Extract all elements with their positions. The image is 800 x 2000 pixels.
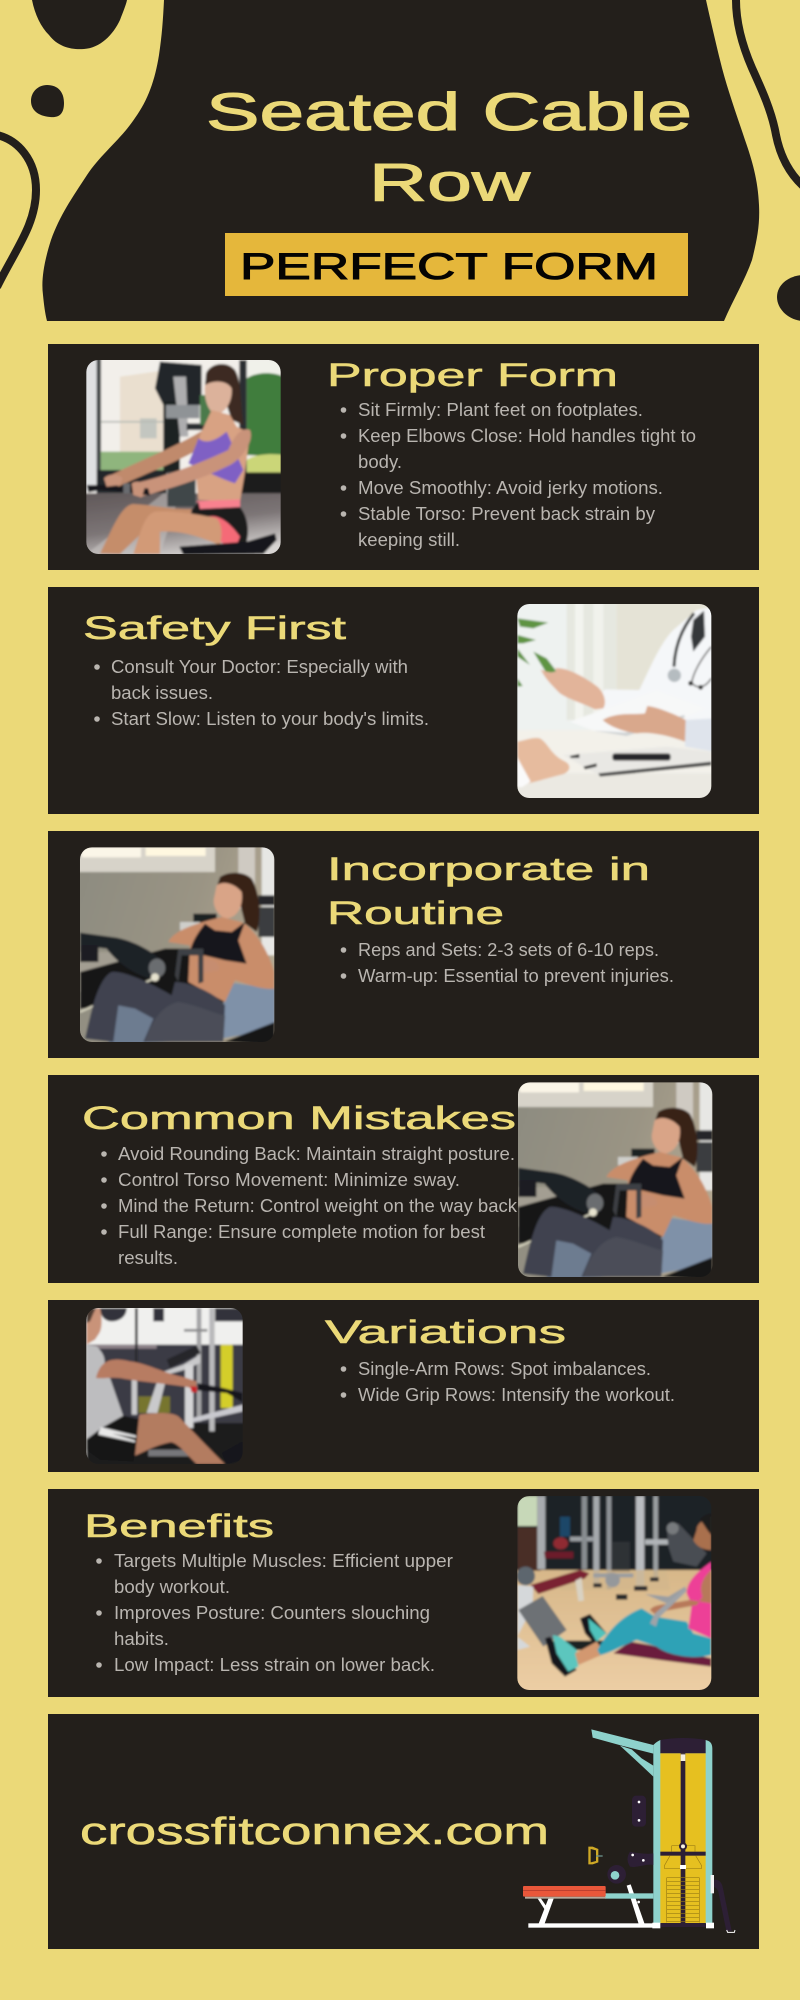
heading: variations: Variations xyxy=(325,1314,566,1350)
bench xyxy=(531,1570,589,1594)
handle xyxy=(190,1386,197,1392)
list: proper form: Move Smoothly: Avoid jerky motions. xyxy=(358,478,663,498)
list: benefits xyxy=(96,1551,453,1675)
thighs xyxy=(100,504,192,554)
seat legs and base xyxy=(528,1899,714,1928)
arm xyxy=(650,1570,711,1616)
panel: variations xyxy=(48,1300,759,1472)
photo: woman on rowing machine xyxy=(86,360,281,554)
list: common mistakes: Control Torso Movement: Minimize sway. xyxy=(118,1170,460,1190)
pulley xyxy=(627,1852,653,1867)
chest and arms xyxy=(168,917,274,1002)
list: common mistakes: Mind the Return: Control weight on the way back xyxy=(118,1196,518,1216)
hands xyxy=(195,959,219,974)
title xyxy=(206,83,692,212)
list: benefits: Low Impact: Less strain on lower back. xyxy=(114,1655,435,1675)
upper pad xyxy=(632,1796,646,1827)
subtitle badge xyxy=(225,233,688,296)
panel: incorporate in routine xyxy=(48,831,759,1058)
list: benefits: habits. xyxy=(114,1629,169,1649)
list: benefits: body workout. xyxy=(114,1577,230,1597)
list: common mistakes: results. xyxy=(118,1248,178,1268)
seat xyxy=(179,533,277,555)
photo: doctor with tablet xyxy=(517,604,712,798)
hands xyxy=(104,475,123,487)
clipboard xyxy=(574,748,710,772)
decorative blob top left xyxy=(32,0,127,49)
seat xyxy=(523,1886,606,1899)
title: Row xyxy=(369,154,531,212)
heading: proper form: Proper Form xyxy=(327,357,618,393)
tablet xyxy=(576,710,642,732)
cable xyxy=(80,978,155,1012)
heading: common mistakes: Common Mistakes xyxy=(82,1100,516,1136)
hair xyxy=(217,873,259,932)
list: variations xyxy=(341,1359,675,1405)
bra xyxy=(190,922,247,964)
list: common mistakes: Avoid Rounding Back: Maintain straight posture. xyxy=(118,1144,515,1164)
lower hand xyxy=(603,706,686,742)
website url: crossfitconnex.com xyxy=(80,1811,549,1853)
list: benefits: Improves Posture: Counters slouching xyxy=(114,1603,430,1623)
seat rail xyxy=(605,1893,653,1899)
list: proper form xyxy=(341,400,696,550)
bra xyxy=(188,432,243,483)
pad xyxy=(80,933,160,979)
shorts xyxy=(192,502,248,550)
photo: woman with cable handle, repeated xyxy=(513,1077,726,1284)
leggings xyxy=(597,1608,711,1657)
panel: safety first xyxy=(48,587,759,814)
right machine xyxy=(667,1523,707,1567)
list: benefits: Targets Multiple Muscles: Efficient upper xyxy=(114,1551,453,1571)
list: proper form: Stable Torso: Prevent back strain by xyxy=(358,504,655,524)
cable arm xyxy=(591,1729,653,1754)
rear bar xyxy=(711,1875,735,1932)
tie xyxy=(691,611,705,652)
list: proper form: keeping still. xyxy=(358,530,460,550)
header blob xyxy=(42,0,759,321)
hair xyxy=(205,364,243,425)
title: Seated Cable xyxy=(206,83,692,142)
coat xyxy=(602,607,712,718)
stethoscope xyxy=(674,613,694,667)
dark floor xyxy=(80,949,228,1009)
arm xyxy=(96,1359,197,1389)
machine xyxy=(516,1567,535,1585)
list: variations: Wide Grip Rows: Intensify the workout. xyxy=(358,1385,675,1405)
decorative blob right xyxy=(777,275,800,321)
decorative curve right xyxy=(736,0,800,186)
seat rail xyxy=(613,1642,711,1667)
list: variations: Single-Arm Rows: Spot imbalances. xyxy=(358,1359,651,1379)
icon: cable row machine xyxy=(523,1729,735,1932)
shorts xyxy=(86,1416,142,1461)
list: proper form: Sit Firmly: Plant feet on footplates. xyxy=(358,400,643,420)
list: safety first xyxy=(94,657,429,729)
head xyxy=(86,1308,102,1345)
heading: incorporate in routine xyxy=(327,851,650,931)
list: proper form: Keep Elbows Close: Hold handles tight to xyxy=(358,426,696,446)
shirt xyxy=(86,1345,123,1440)
subtitle badge: PERFECT FORM xyxy=(240,246,658,287)
list: common mistakes: Full Range: Ensure complete motion for best xyxy=(118,1222,485,1242)
panel: website footer xyxy=(48,1714,759,1949)
list: safety first: back issues. xyxy=(111,683,213,703)
tower top xyxy=(660,1738,706,1753)
decorative small blob xyxy=(31,85,64,117)
photo: woman on rowing machine in gym xyxy=(510,1490,723,1697)
weight stack xyxy=(660,1753,706,1927)
heading: safety first: Safety First xyxy=(83,610,346,646)
panel: common mistakes xyxy=(48,1075,759,1284)
list: common mistakes xyxy=(101,1144,518,1268)
photo: woman with cable handle xyxy=(75,842,288,1049)
front arm xyxy=(133,429,251,497)
panel: proper form xyxy=(48,344,759,570)
list: incorporate in routine: Reps and Sets: 2-3 sets of 6-10 reps. xyxy=(358,940,659,960)
tower frame xyxy=(653,1740,712,1923)
heading: incorporate in routine: Incorporate in xyxy=(327,851,650,887)
head xyxy=(693,1517,711,1550)
list: proper form: body. xyxy=(358,452,402,472)
upper hand xyxy=(541,668,605,709)
bench xyxy=(167,1346,201,1368)
shoes xyxy=(553,1635,578,1672)
handle xyxy=(588,1847,598,1864)
face xyxy=(205,382,232,414)
list: safety first: Start Slow: Listen to your body's limits. xyxy=(111,709,429,729)
leggings xyxy=(85,972,225,1042)
face xyxy=(214,883,242,919)
torso xyxy=(195,410,250,502)
calf xyxy=(575,1642,605,1665)
list: incorporate in routine xyxy=(341,940,674,986)
decorative curve left xyxy=(0,135,36,287)
back arm xyxy=(110,430,212,487)
knee pad xyxy=(607,1865,645,1925)
list: incorporate in routine: Warm-up: Essential to prevent injuries. xyxy=(358,966,674,986)
photo: man rowing xyxy=(86,1308,243,1464)
torso xyxy=(687,1562,711,1638)
panel: benefits xyxy=(48,1489,759,1697)
waistband xyxy=(197,499,240,510)
list: safety first: Consult Your Doctor: Especially with xyxy=(111,657,408,677)
heading: incorporate in routine: Routine xyxy=(327,895,504,931)
plant xyxy=(517,618,557,687)
handle xyxy=(87,485,150,496)
patient hand xyxy=(517,738,569,783)
heading: benefits: Benefits xyxy=(84,1508,274,1544)
leg xyxy=(135,1413,225,1464)
